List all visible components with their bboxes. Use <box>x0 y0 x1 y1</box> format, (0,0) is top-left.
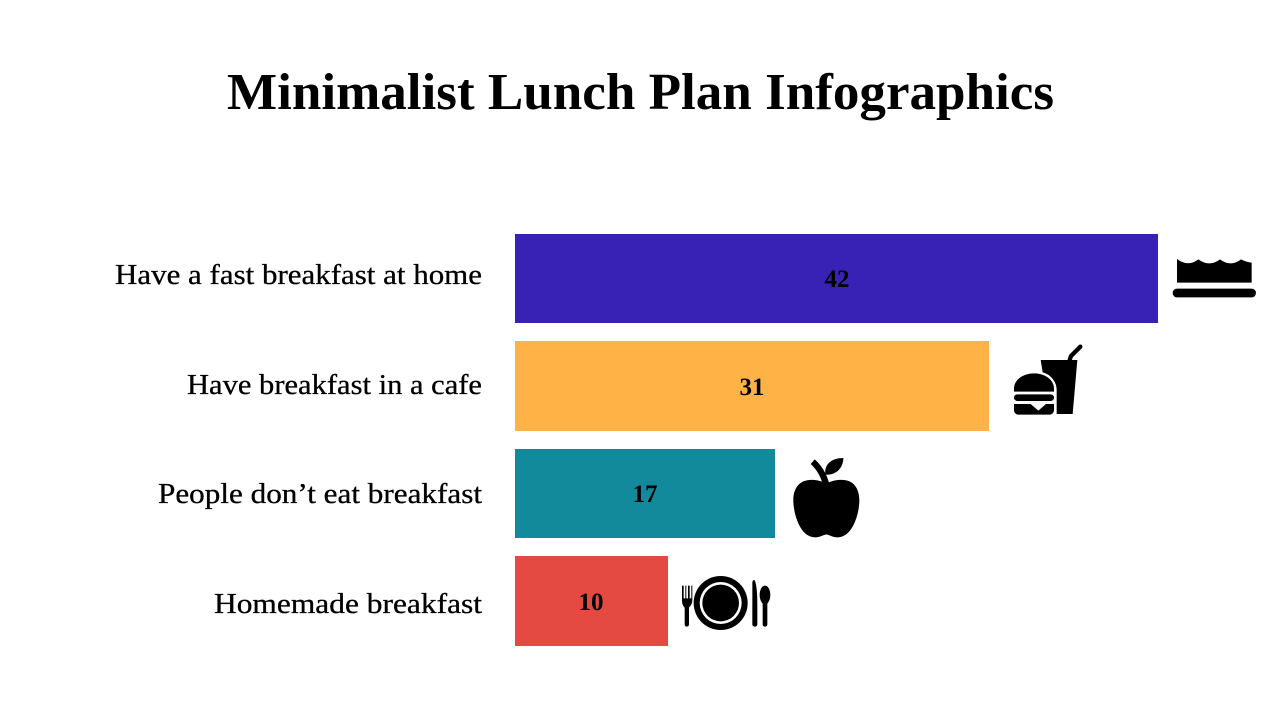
bar: 42 <box>515 234 1158 323</box>
label: homemade breakfast: Homemade breakfast <box>214 588 482 620</box>
row 2: breakfast in a cafe <box>187 341 1080 431</box>
icon: cake <box>1173 259 1256 297</box>
icon: burger and drink <box>1014 347 1080 415</box>
label: people don't eat breakfast: People don’t eat breakfast <box>158 478 482 510</box>
value: 42: 42 <box>824 266 850 293</box>
row 1: fast breakfast at home <box>115 234 1256 323</box>
value: 10: 10 <box>578 589 604 616</box>
value: 31: 31 <box>740 374 764 401</box>
label: have breakfast in a cafe: Have breakfast in a cafe <box>187 369 482 401</box>
icon: apple <box>793 458 859 537</box>
bar: 10 <box>515 556 668 646</box>
value: 17: 17 <box>632 481 658 508</box>
bar: 31 <box>515 341 989 431</box>
bar: 17 <box>515 449 775 538</box>
title: Minimalist Lunch Plan Infographics <box>227 64 1054 121</box>
row 4: homemade breakfast <box>214 556 770 646</box>
icon: plate and cutlery <box>682 576 770 630</box>
row 3: people don't eat breakfast <box>158 449 859 538</box>
label: have a fast breakfast at home: Have a fast breakfast at home <box>115 259 482 291</box>
